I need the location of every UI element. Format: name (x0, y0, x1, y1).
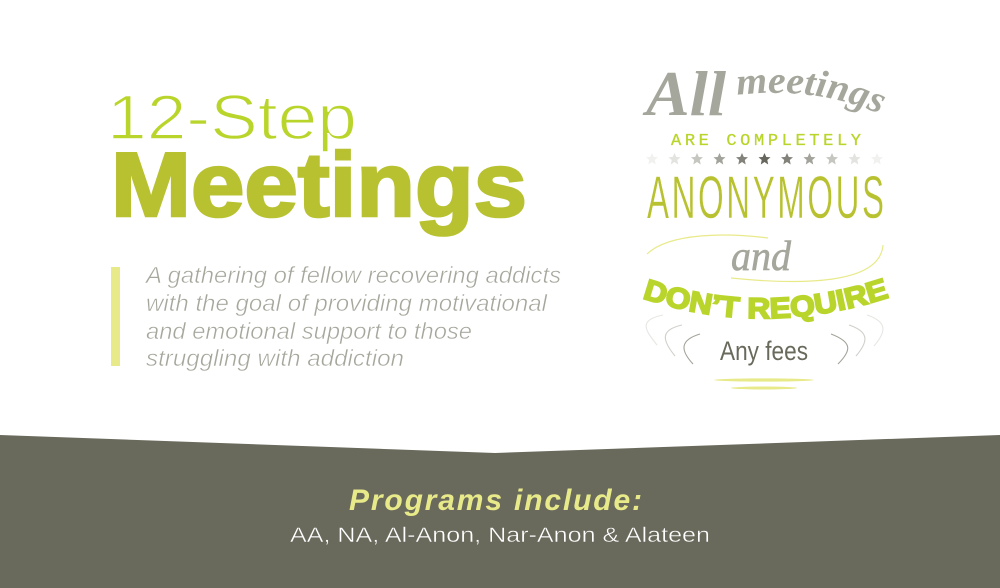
script text: and: and (731, 234, 792, 280)
text: any fees: Any fees (720, 336, 808, 366)
description text: with the goal of providing motivational (146, 290, 548, 316)
decorative underline strokes (714, 378, 814, 390)
panel: anonymity badge (642, 58, 890, 390)
title (107, 83, 527, 236)
decorative swashes around and (647, 235, 883, 282)
band heading: Programs include: (349, 484, 642, 517)
decorative brackets (646, 315, 883, 364)
icon: row of stars (646, 153, 883, 164)
description text: and emotional support to those (146, 318, 472, 344)
script heading: All meetings: All (642, 58, 726, 129)
description text (144, 262, 562, 371)
band background (0, 435, 1000, 588)
accent bar (111, 267, 120, 366)
arched text: don't require: DON’T REQUIRE (642, 278, 890, 322)
description text: A gathering of fellow recovering addicts (144, 262, 562, 288)
panel: programs band (0, 435, 1000, 588)
text: are completely: ARE COMPLETELY (671, 132, 861, 151)
text: anonymous: ANONYMOUS (647, 165, 884, 232)
program list: AA, NA, Al-Anon, Nar-Anon & Alateen (290, 524, 710, 547)
title line: 12-Step: 12-Step (107, 83, 357, 153)
script heading: All meetings (642, 58, 886, 129)
description text: struggling with addiction (146, 345, 404, 371)
script heading: All meetings: meetings (738, 70, 886, 112)
title line: Meetings: Meetings (111, 135, 527, 236)
